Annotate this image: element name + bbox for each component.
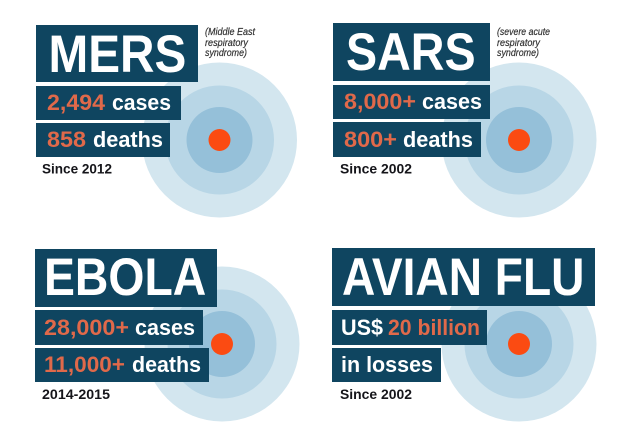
stat: Ebola deaths: 11,000+ xyxy=(44,352,125,377)
stat: SARS cases: cases xyxy=(422,89,482,114)
note: SARS full name: respiratory xyxy=(497,38,541,49)
icon: MERS target circles xyxy=(142,62,297,218)
panel: MERS xyxy=(36,24,297,218)
icon: Ebola target circles xyxy=(144,266,300,422)
stat: MERS deaths xyxy=(36,123,170,157)
panel: SARS xyxy=(333,22,596,218)
date: since 2002: Since 2002 xyxy=(340,162,412,176)
heading: MERS: MERS xyxy=(48,24,186,84)
panel: Ebola xyxy=(35,247,300,422)
stat: Ebola cases xyxy=(35,310,203,345)
stat: MERS cases xyxy=(36,86,181,120)
note: MERS full name xyxy=(205,27,256,59)
stat: MERS deaths: deaths xyxy=(93,127,163,152)
note: MERS full name: syndrome) xyxy=(205,48,247,59)
note: SARS full name: (severe acute xyxy=(497,27,550,38)
stat: in losses: in losses xyxy=(341,352,433,377)
stat: MERS deaths: 858 xyxy=(47,127,86,152)
stat: Ebola cases: cases xyxy=(135,315,195,340)
note: MERS full name: respiratory xyxy=(205,38,249,49)
stat: in losses xyxy=(332,348,441,382)
stat: SARS deaths xyxy=(333,122,481,157)
date: since 2012: Since 2012 xyxy=(42,162,112,176)
heading: SARS: SARS xyxy=(346,22,476,82)
heading: EBOLA: EBOLA xyxy=(44,247,206,307)
panel: Avian flu xyxy=(332,247,596,422)
icon: Avian flu target circles xyxy=(442,266,596,422)
date: since 2002: Since 2002 xyxy=(340,387,412,402)
stat: SARS deaths: 800+ xyxy=(344,127,397,152)
stat: SARS cases: 8,000+ xyxy=(344,89,416,114)
note: SARS full name: syndrome) xyxy=(497,48,539,59)
stat: MERS cases: cases xyxy=(112,90,171,115)
stat: Ebola cases: 28,000+ xyxy=(44,315,129,340)
heading: AVIAN FLU: AVIAN FLU xyxy=(342,247,584,307)
stat: losses amount: 20 billion xyxy=(388,315,480,340)
note: SARS full name xyxy=(497,27,550,59)
note: MERS full name: (Middle East xyxy=(205,27,256,38)
stat: Ebola deaths xyxy=(35,348,209,382)
date: 2014-2015: 2014-2015 xyxy=(42,387,111,402)
stat: SARS cases xyxy=(333,85,490,119)
stat: Ebola deaths: deaths xyxy=(132,352,201,377)
stat: MERS cases: 2,494 xyxy=(47,90,106,115)
stat: losses amount: US$ xyxy=(341,315,383,340)
stat: SARS deaths: deaths xyxy=(403,127,473,152)
icon: SARS target circles xyxy=(442,62,596,218)
stat: losses amount xyxy=(332,310,487,345)
